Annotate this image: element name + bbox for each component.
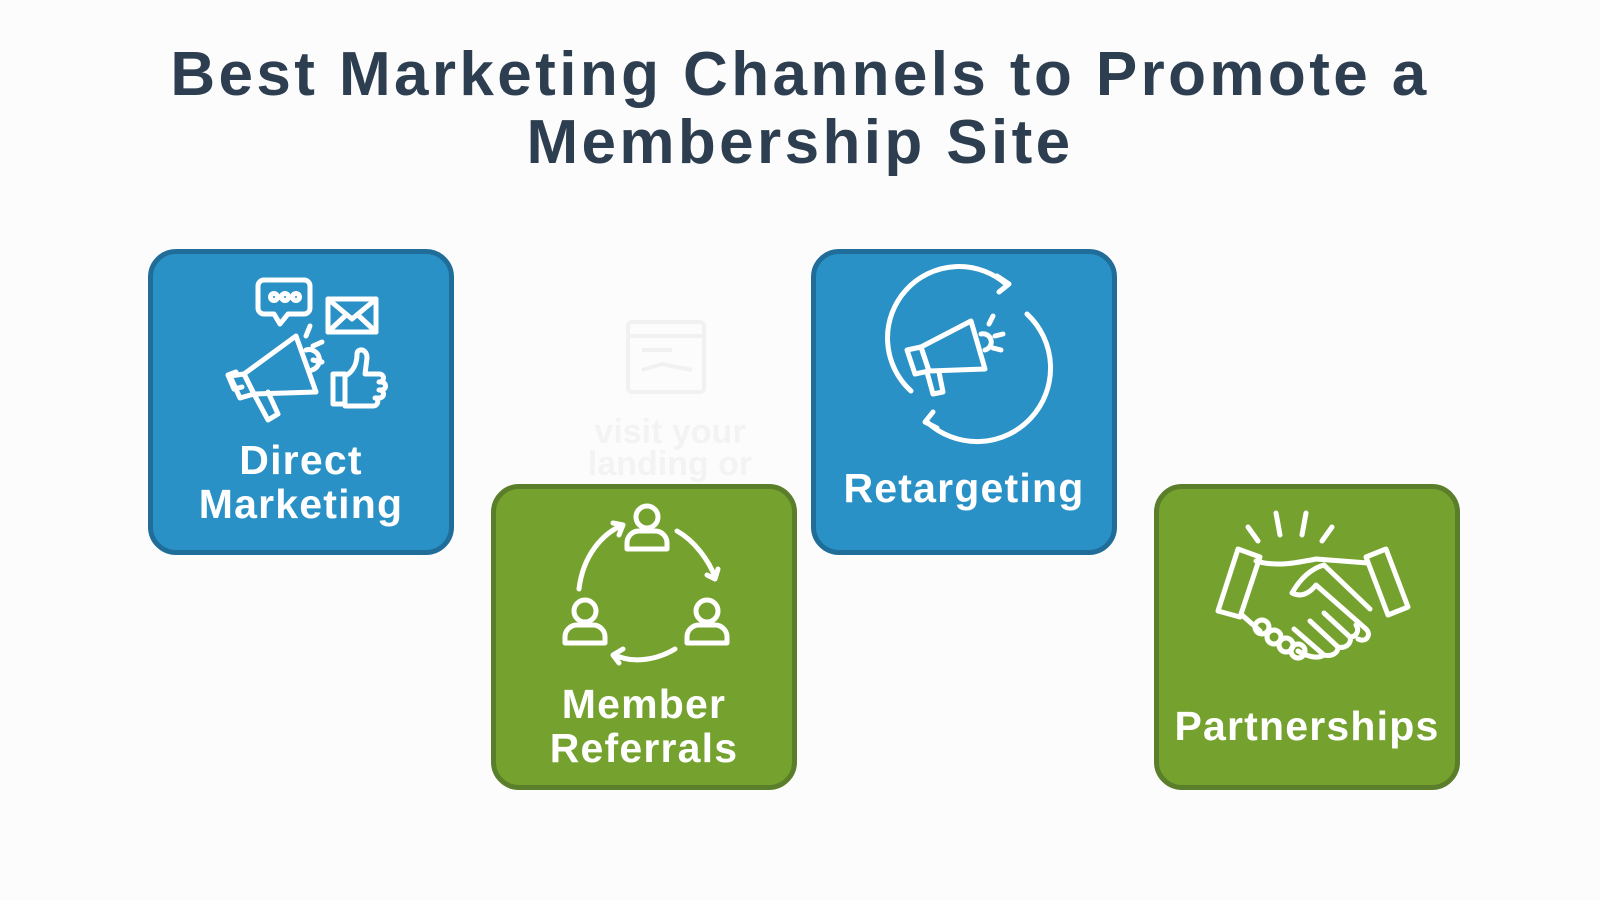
icon: handshake	[1216, 510, 1410, 660]
label: Direct Marketing: Marketing	[199, 481, 403, 527]
panel: member referrals	[491, 484, 797, 790]
label: Member Referrals: Referrals	[550, 725, 738, 771]
text: visit your landing (faint): visit your	[594, 413, 746, 451]
panel: partnerships	[1154, 484, 1460, 790]
panel: retargeting	[811, 249, 1117, 555]
label: Partnerships: Partnerships	[1174, 703, 1440, 749]
label: Direct Marketing	[199, 437, 403, 527]
icon: megaphone in circular arrows	[885, 264, 1054, 444]
icon: referral cycle	[562, 504, 730, 666]
panel: direct marketing	[148, 249, 454, 555]
label: Direct Marketing: Direct	[239, 437, 363, 483]
faint hidden card: visit your landing	[588, 320, 752, 483]
title	[170, 40, 1430, 177]
text: visit your landing (faint)	[588, 413, 752, 483]
label: Member Referrals: Member	[562, 681, 726, 727]
title: Membership Site	[526, 108, 1074, 177]
title: Best Marketing Channels to Promote a	[170, 40, 1430, 109]
icon: browser window (faint)	[626, 320, 706, 394]
label: Member Referrals	[550, 681, 738, 771]
icon: megaphone with messages	[226, 278, 388, 422]
text: visit your landing (faint): landing or	[588, 445, 752, 483]
label: Retargeting: Retargeting	[843, 465, 1084, 511]
